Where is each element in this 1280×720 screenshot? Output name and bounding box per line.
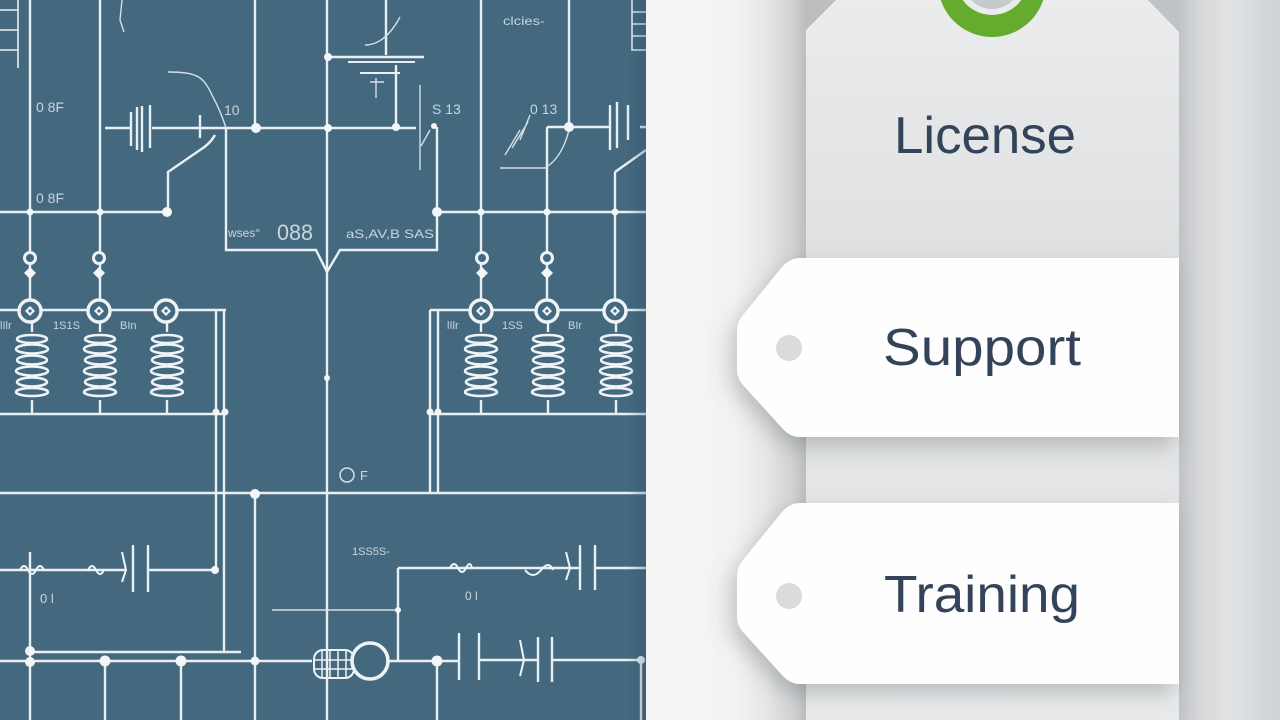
blueprint labels: 088: [277, 220, 313, 245]
tag: Support: [737, 258, 1179, 437]
blueprint labels: lIlr: [0, 320, 12, 332]
circuit wiring lines: [0, 0, 646, 720]
blueprint labels: 1SS5S-: [352, 546, 390, 558]
ring symbols: [19, 252, 626, 482]
tag hole: [776, 335, 802, 361]
blueprint labels: BIn: [120, 320, 137, 332]
background: light grey wall: [646, 0, 1280, 720]
blueprint labels: F: [360, 468, 368, 483]
blueprint labels: aS,AV,B SAS: [346, 227, 434, 241]
blueprint labels: 0 8F: [36, 99, 64, 115]
blueprint labels: lIlr: [447, 320, 459, 332]
blueprint labels: S 13: [432, 101, 461, 117]
icon: green eyelet: [938, 0, 1046, 37]
junction dots: [25, 53, 645, 667]
blueprint labels: [0, 14, 582, 606]
blueprint labels: 1SS: [502, 320, 523, 332]
tag hole: [776, 583, 802, 609]
blueprint labels: BIr: [568, 320, 582, 332]
motor symbol: [314, 643, 388, 679]
blueprint labels: 0 l: [465, 589, 478, 603]
label: License: License: [894, 107, 1076, 165]
label: Training: Training: [884, 566, 1080, 624]
coil groups: [14, 310, 634, 414]
blueprint labels: 0 l: [40, 591, 54, 606]
blueprint labels: 0 8F: [36, 190, 64, 206]
wire squiggles: [20, 552, 570, 676]
tag: License: [806, 0, 1179, 720]
panel edge shading: [626, 0, 646, 720]
blueprint labels: clcies-: [503, 14, 545, 28]
blueprint labels: 0 13: [530, 101, 557, 117]
panel: circuit blueprint: [0, 0, 646, 720]
blueprint labels: 10: [224, 102, 240, 118]
blueprint labels: wses°: [227, 226, 260, 240]
label: Support: Support: [883, 319, 1082, 377]
tag: Training: [737, 503, 1179, 684]
thin annotation strokes: [120, 0, 569, 610]
blueprint labels: 1S1S: [53, 320, 80, 332]
